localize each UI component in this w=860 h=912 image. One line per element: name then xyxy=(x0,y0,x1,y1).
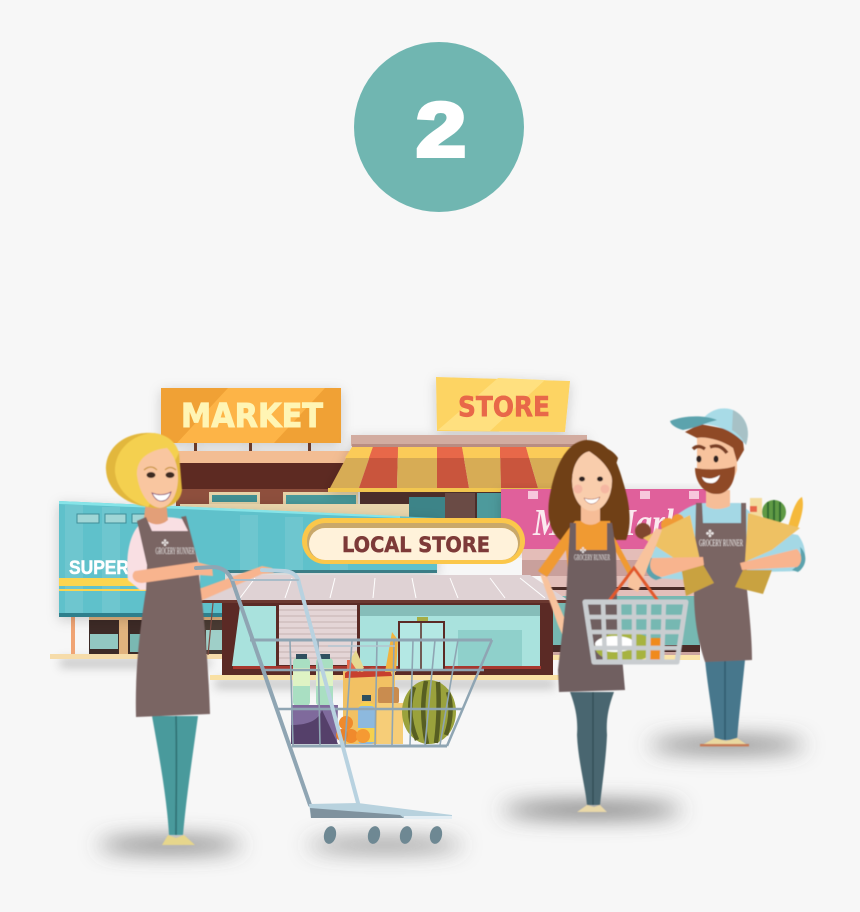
man with grocery bags xyxy=(635,408,805,746)
store lower wall xyxy=(360,492,510,522)
lower shop windows xyxy=(50,617,225,659)
groceries in bags xyxy=(635,497,803,539)
hair back xyxy=(106,433,182,508)
woman with basket xyxy=(538,440,686,812)
pink banner: Mini Market xyxy=(532,502,706,544)
store sign: STORE xyxy=(458,390,550,423)
local store sign: LOCAL STORE xyxy=(342,533,490,557)
step number badge xyxy=(354,42,524,212)
mini market wall xyxy=(522,549,700,660)
supermarket building xyxy=(50,501,437,659)
grocery bags xyxy=(643,513,800,596)
cap xyxy=(670,408,748,445)
apron: GROCERY RUNNER xyxy=(699,538,743,548)
arms xyxy=(540,574,570,640)
legs xyxy=(570,692,614,812)
watermelon xyxy=(402,680,456,744)
apron: ✤ xyxy=(580,546,587,555)
apron xyxy=(558,523,625,692)
teal facade: SUPER xyxy=(69,558,129,579)
far arm xyxy=(196,566,274,602)
apron: GROCERY RUNNER xyxy=(156,546,194,556)
shop wall and windows xyxy=(210,602,560,680)
shopping cart xyxy=(196,567,492,845)
local store sign xyxy=(302,518,525,564)
local store building xyxy=(200,518,568,680)
face and beard xyxy=(685,424,744,494)
market sign xyxy=(161,388,341,452)
pink banner xyxy=(501,489,710,549)
groceries xyxy=(291,632,456,744)
legs xyxy=(152,716,198,845)
near arm xyxy=(133,562,213,583)
face xyxy=(572,446,618,511)
market facade xyxy=(176,451,358,506)
mini market building xyxy=(501,489,710,660)
woman with shopping cart xyxy=(106,433,274,845)
apron xyxy=(136,516,210,717)
store sign xyxy=(436,377,570,432)
shirt sleeve cuffs xyxy=(646,547,805,580)
neck xyxy=(706,490,730,509)
shop awning xyxy=(200,575,568,655)
cart handle and frame xyxy=(196,567,358,805)
cart basket frame xyxy=(250,640,492,746)
ground shadows xyxy=(98,738,805,852)
apron xyxy=(694,503,752,662)
store building xyxy=(180,377,587,522)
building base shadows xyxy=(60,659,555,688)
hair back xyxy=(548,440,630,540)
apron: ✤ xyxy=(706,529,714,540)
cream ledge xyxy=(180,504,409,518)
cart base xyxy=(309,803,452,819)
market building xyxy=(161,388,358,506)
basket contents xyxy=(595,632,664,662)
store roof and awning xyxy=(328,435,587,492)
apron: GROCERY RUNNER xyxy=(574,553,610,562)
forearms xyxy=(650,557,704,577)
teal facade xyxy=(59,501,437,617)
shirt xyxy=(538,521,632,577)
step number badge: 2 xyxy=(416,88,466,173)
market sign: MARKET xyxy=(181,396,323,435)
legs xyxy=(700,660,749,746)
neck xyxy=(581,505,600,525)
face xyxy=(137,448,178,508)
cart wheels xyxy=(322,825,444,845)
neck xyxy=(144,500,168,524)
shirt xyxy=(127,517,200,590)
shirt xyxy=(646,503,805,580)
basket xyxy=(585,568,686,662)
apron: ✤ xyxy=(161,538,169,548)
